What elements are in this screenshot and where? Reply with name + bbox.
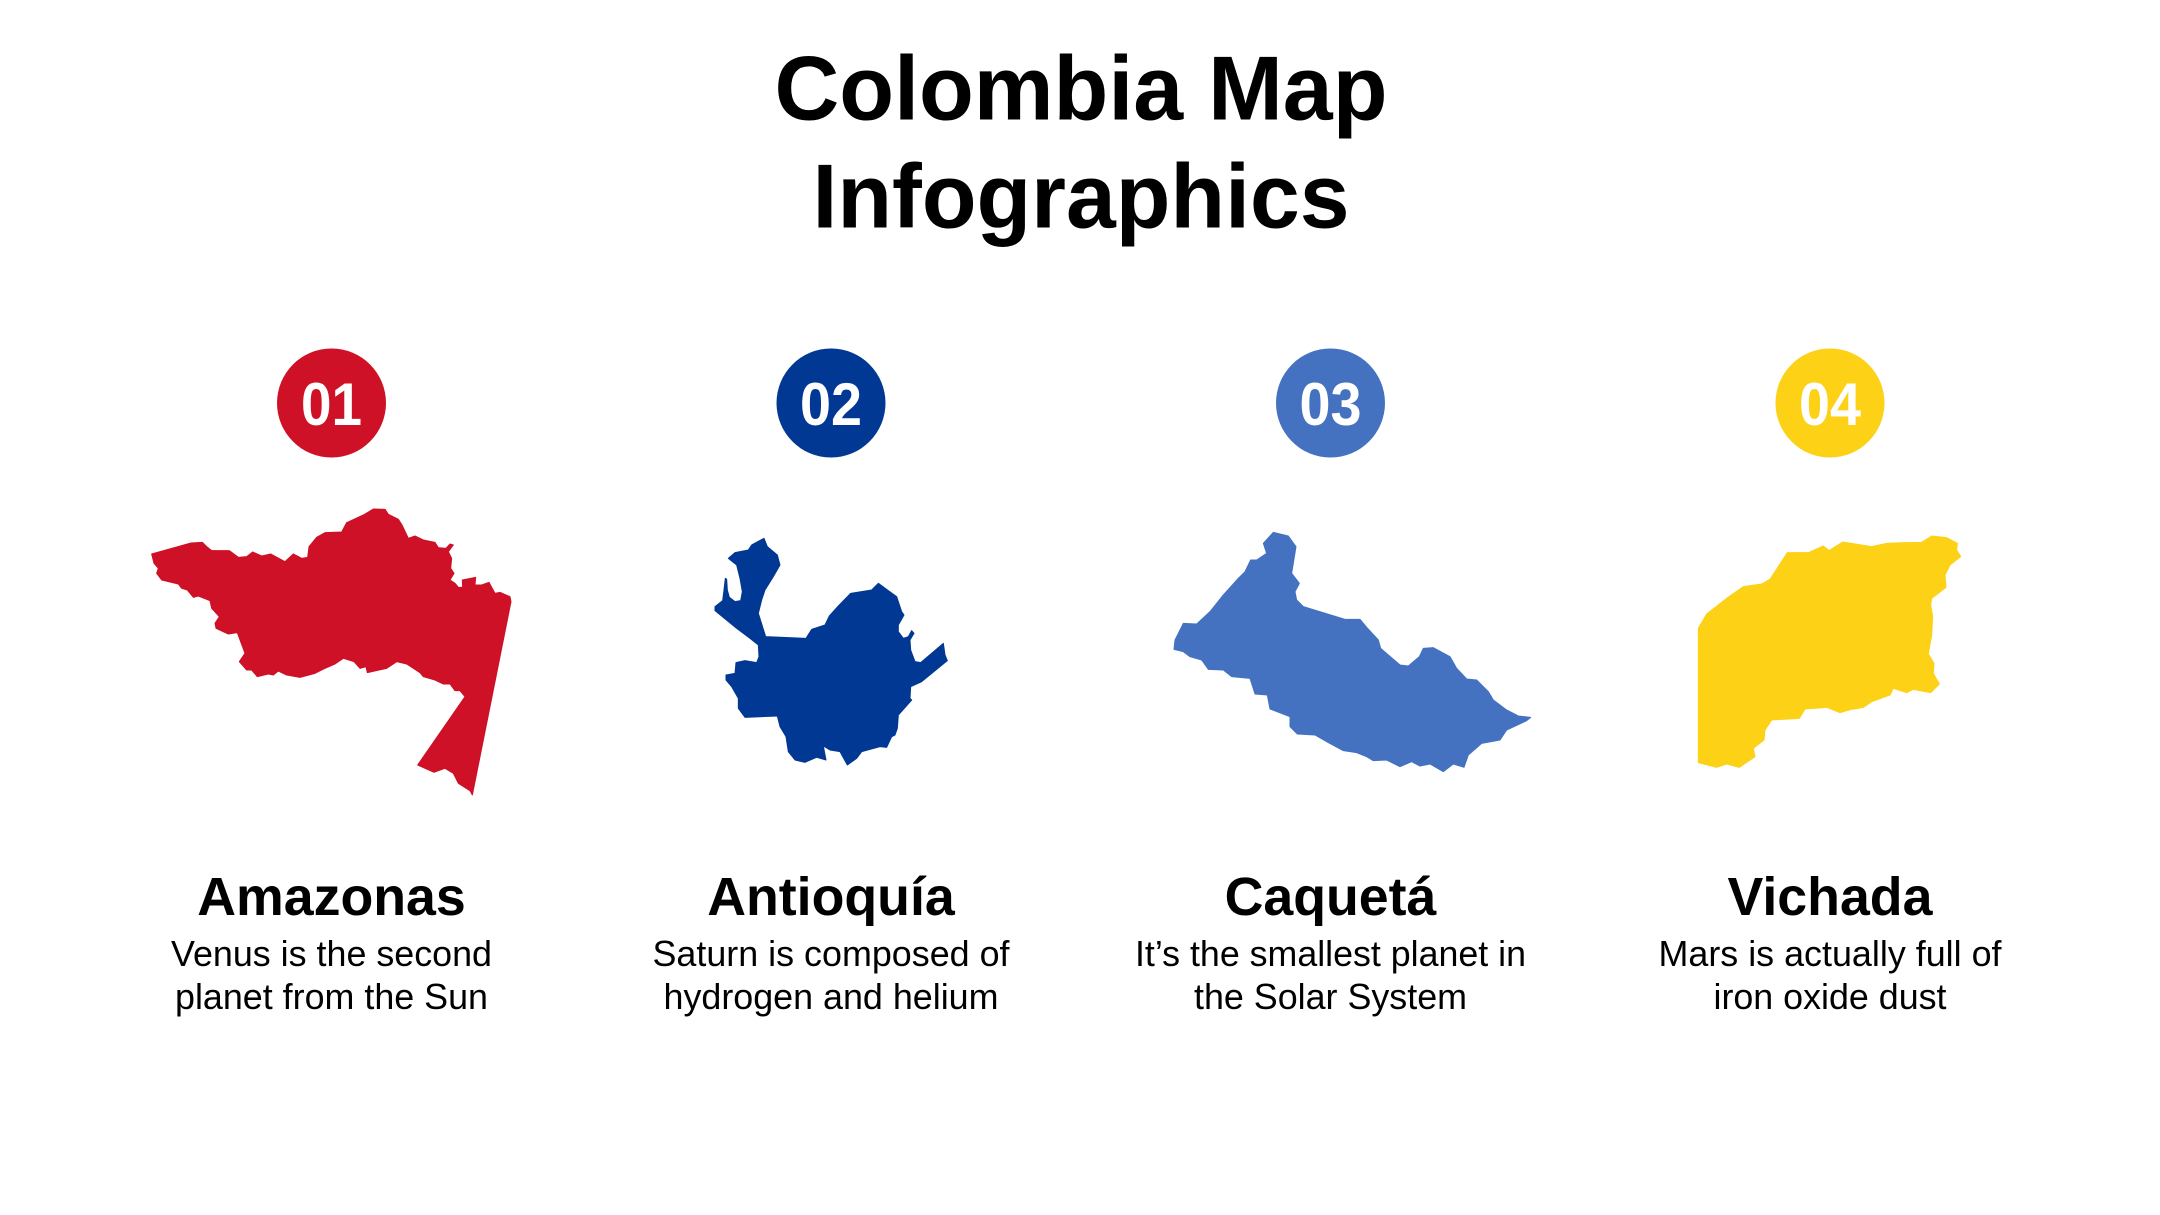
number badge 04 (1776, 348, 1884, 458)
description: Vichada: iron oxide dust (1714, 976, 1946, 1017)
heading: Amazonas: Amazonas (197, 867, 466, 927)
panel: Vichada (1658, 348, 2002, 1017)
description: Caquetá: It’s the smallest planet in (1135, 933, 1526, 974)
heading: Vichada: Vichada (1728, 867, 1934, 927)
description: Caquetá (1135, 933, 1526, 1017)
description: Amazonas: planet from the Sun (175, 976, 488, 1017)
description: Vichada (1658, 933, 2002, 1017)
description: Antioquía (652, 933, 1010, 1017)
map: Amazonas (152, 509, 511, 795)
description: Antioquía: hydrogen and helium (664, 976, 998, 1017)
description: Caquetá: the Solar System (1194, 976, 1467, 1017)
title: Colombia Map (774, 38, 1388, 140)
number badge 03: 03 (1300, 371, 1362, 438)
map: Vichada (1698, 536, 1961, 767)
map: Antioquía (715, 538, 947, 765)
description: Antioquía: Saturn is composed of (652, 933, 1010, 974)
heading: Antioquía: Antioquía (707, 867, 956, 927)
title: Infographics (812, 146, 1350, 248)
title (774, 38, 1388, 248)
number badge 04: 04 (1799, 371, 1862, 438)
panel: Caquetá (1135, 348, 1531, 1017)
number badge 01 (277, 348, 386, 458)
number badge 02 (776, 348, 886, 458)
map: Caquetá (1174, 532, 1531, 772)
heading: Caquetá: Caquetá (1225, 867, 1437, 927)
panel: Amazonas (152, 348, 511, 1017)
panel: Antioquía (652, 348, 1010, 1017)
description: Amazonas (171, 933, 492, 1017)
description: Vichada: Mars is actually full of (1658, 933, 2002, 974)
number badge 02: 02 (800, 371, 862, 438)
description: Amazonas: Venus is the second (171, 933, 492, 974)
number badge 03 (1276, 348, 1385, 458)
number badge 01: 01 (301, 371, 362, 438)
